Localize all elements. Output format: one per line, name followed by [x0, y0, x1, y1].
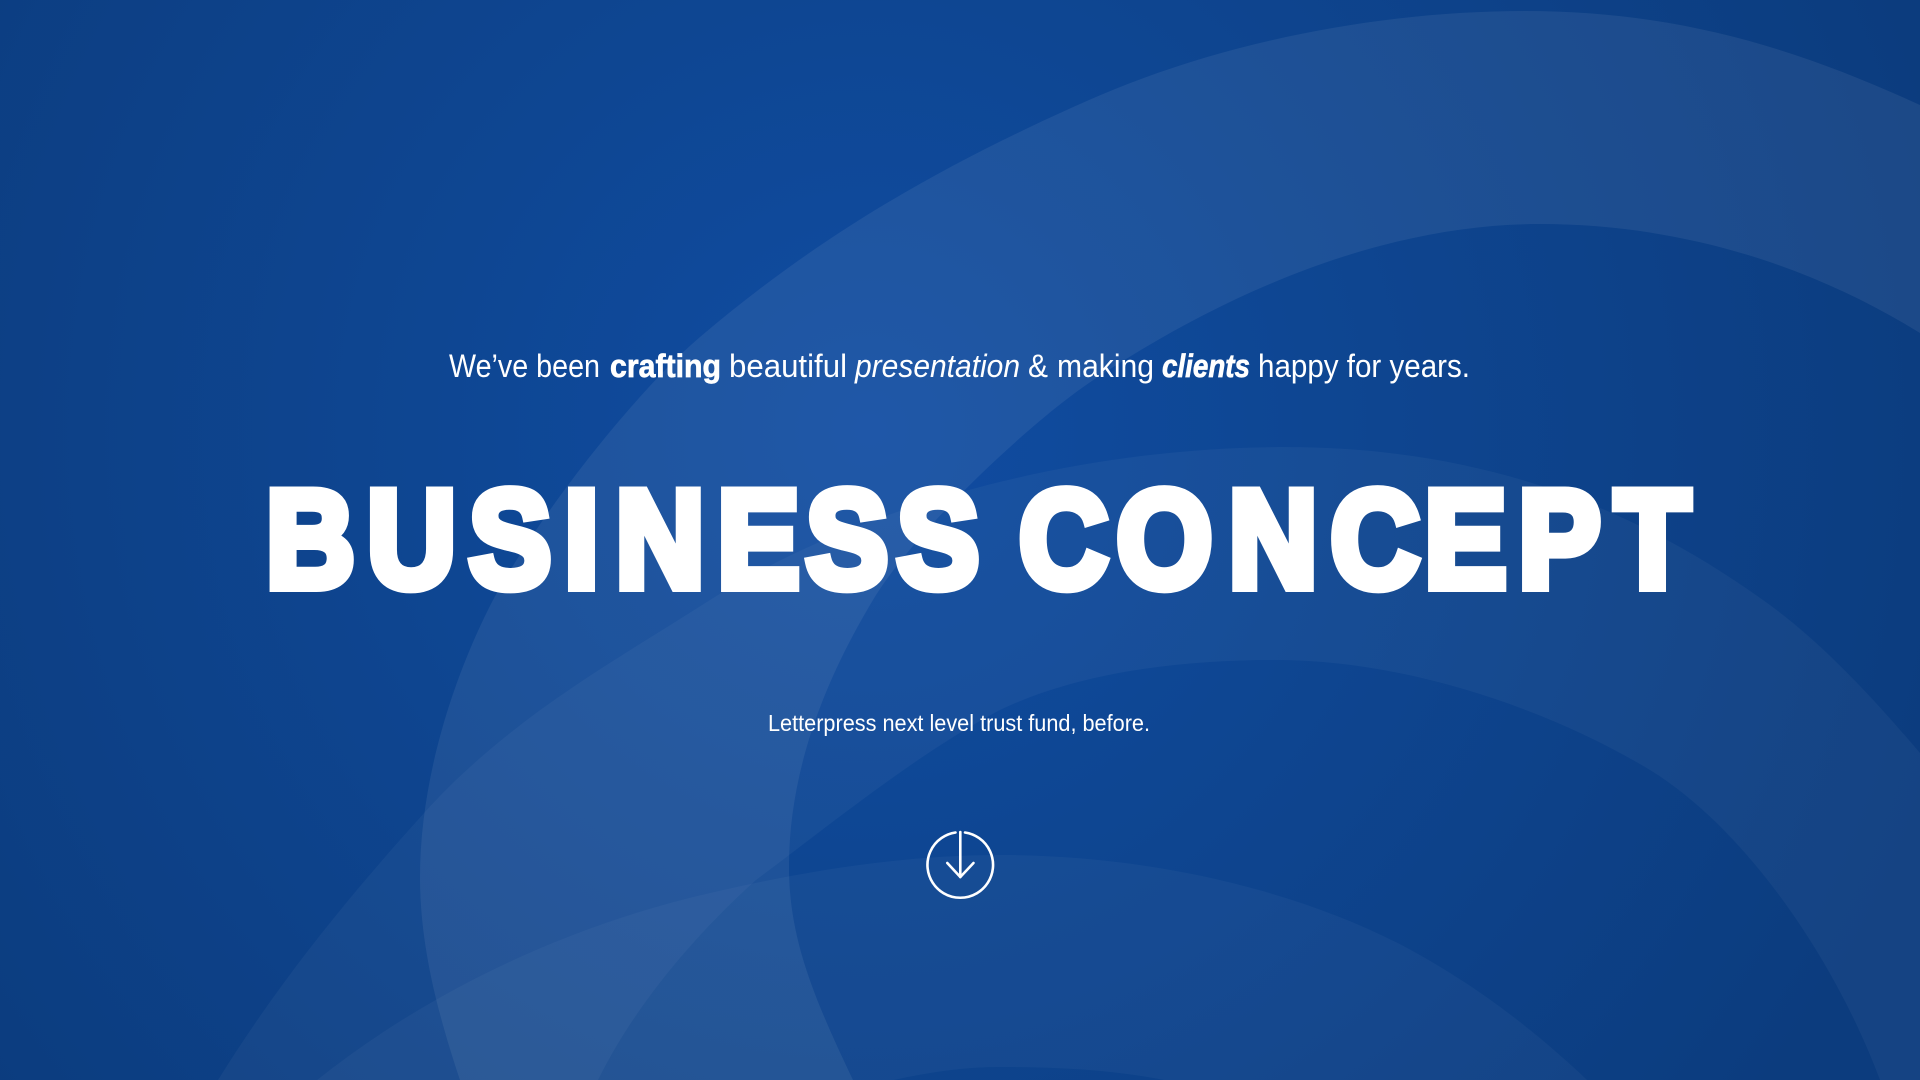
title: BUSINESS CONCEPT: [266, 462, 1690, 616]
icon: down arrow in circle: [927, 832, 993, 898]
tagline: We’ve been: [449, 348, 600, 384]
swoosh band: bottom arc: [317, 855, 1587, 1080]
tagline: &: [1028, 348, 1048, 384]
tagline: making: [1057, 348, 1154, 384]
tagline: beautiful: [729, 348, 847, 384]
swoosh band: outer large arc: [420, 11, 1920, 1080]
tagline: crafting: [610, 348, 721, 384]
swoosh band: middle arc: [218, 447, 1920, 1080]
tagline: happy for years.: [1258, 348, 1470, 384]
subtitle: Letterpress next level trust fund, before.: [768, 710, 1150, 736]
tagline: presentation: [854, 348, 1020, 384]
tagline: clients: [1162, 348, 1250, 384]
